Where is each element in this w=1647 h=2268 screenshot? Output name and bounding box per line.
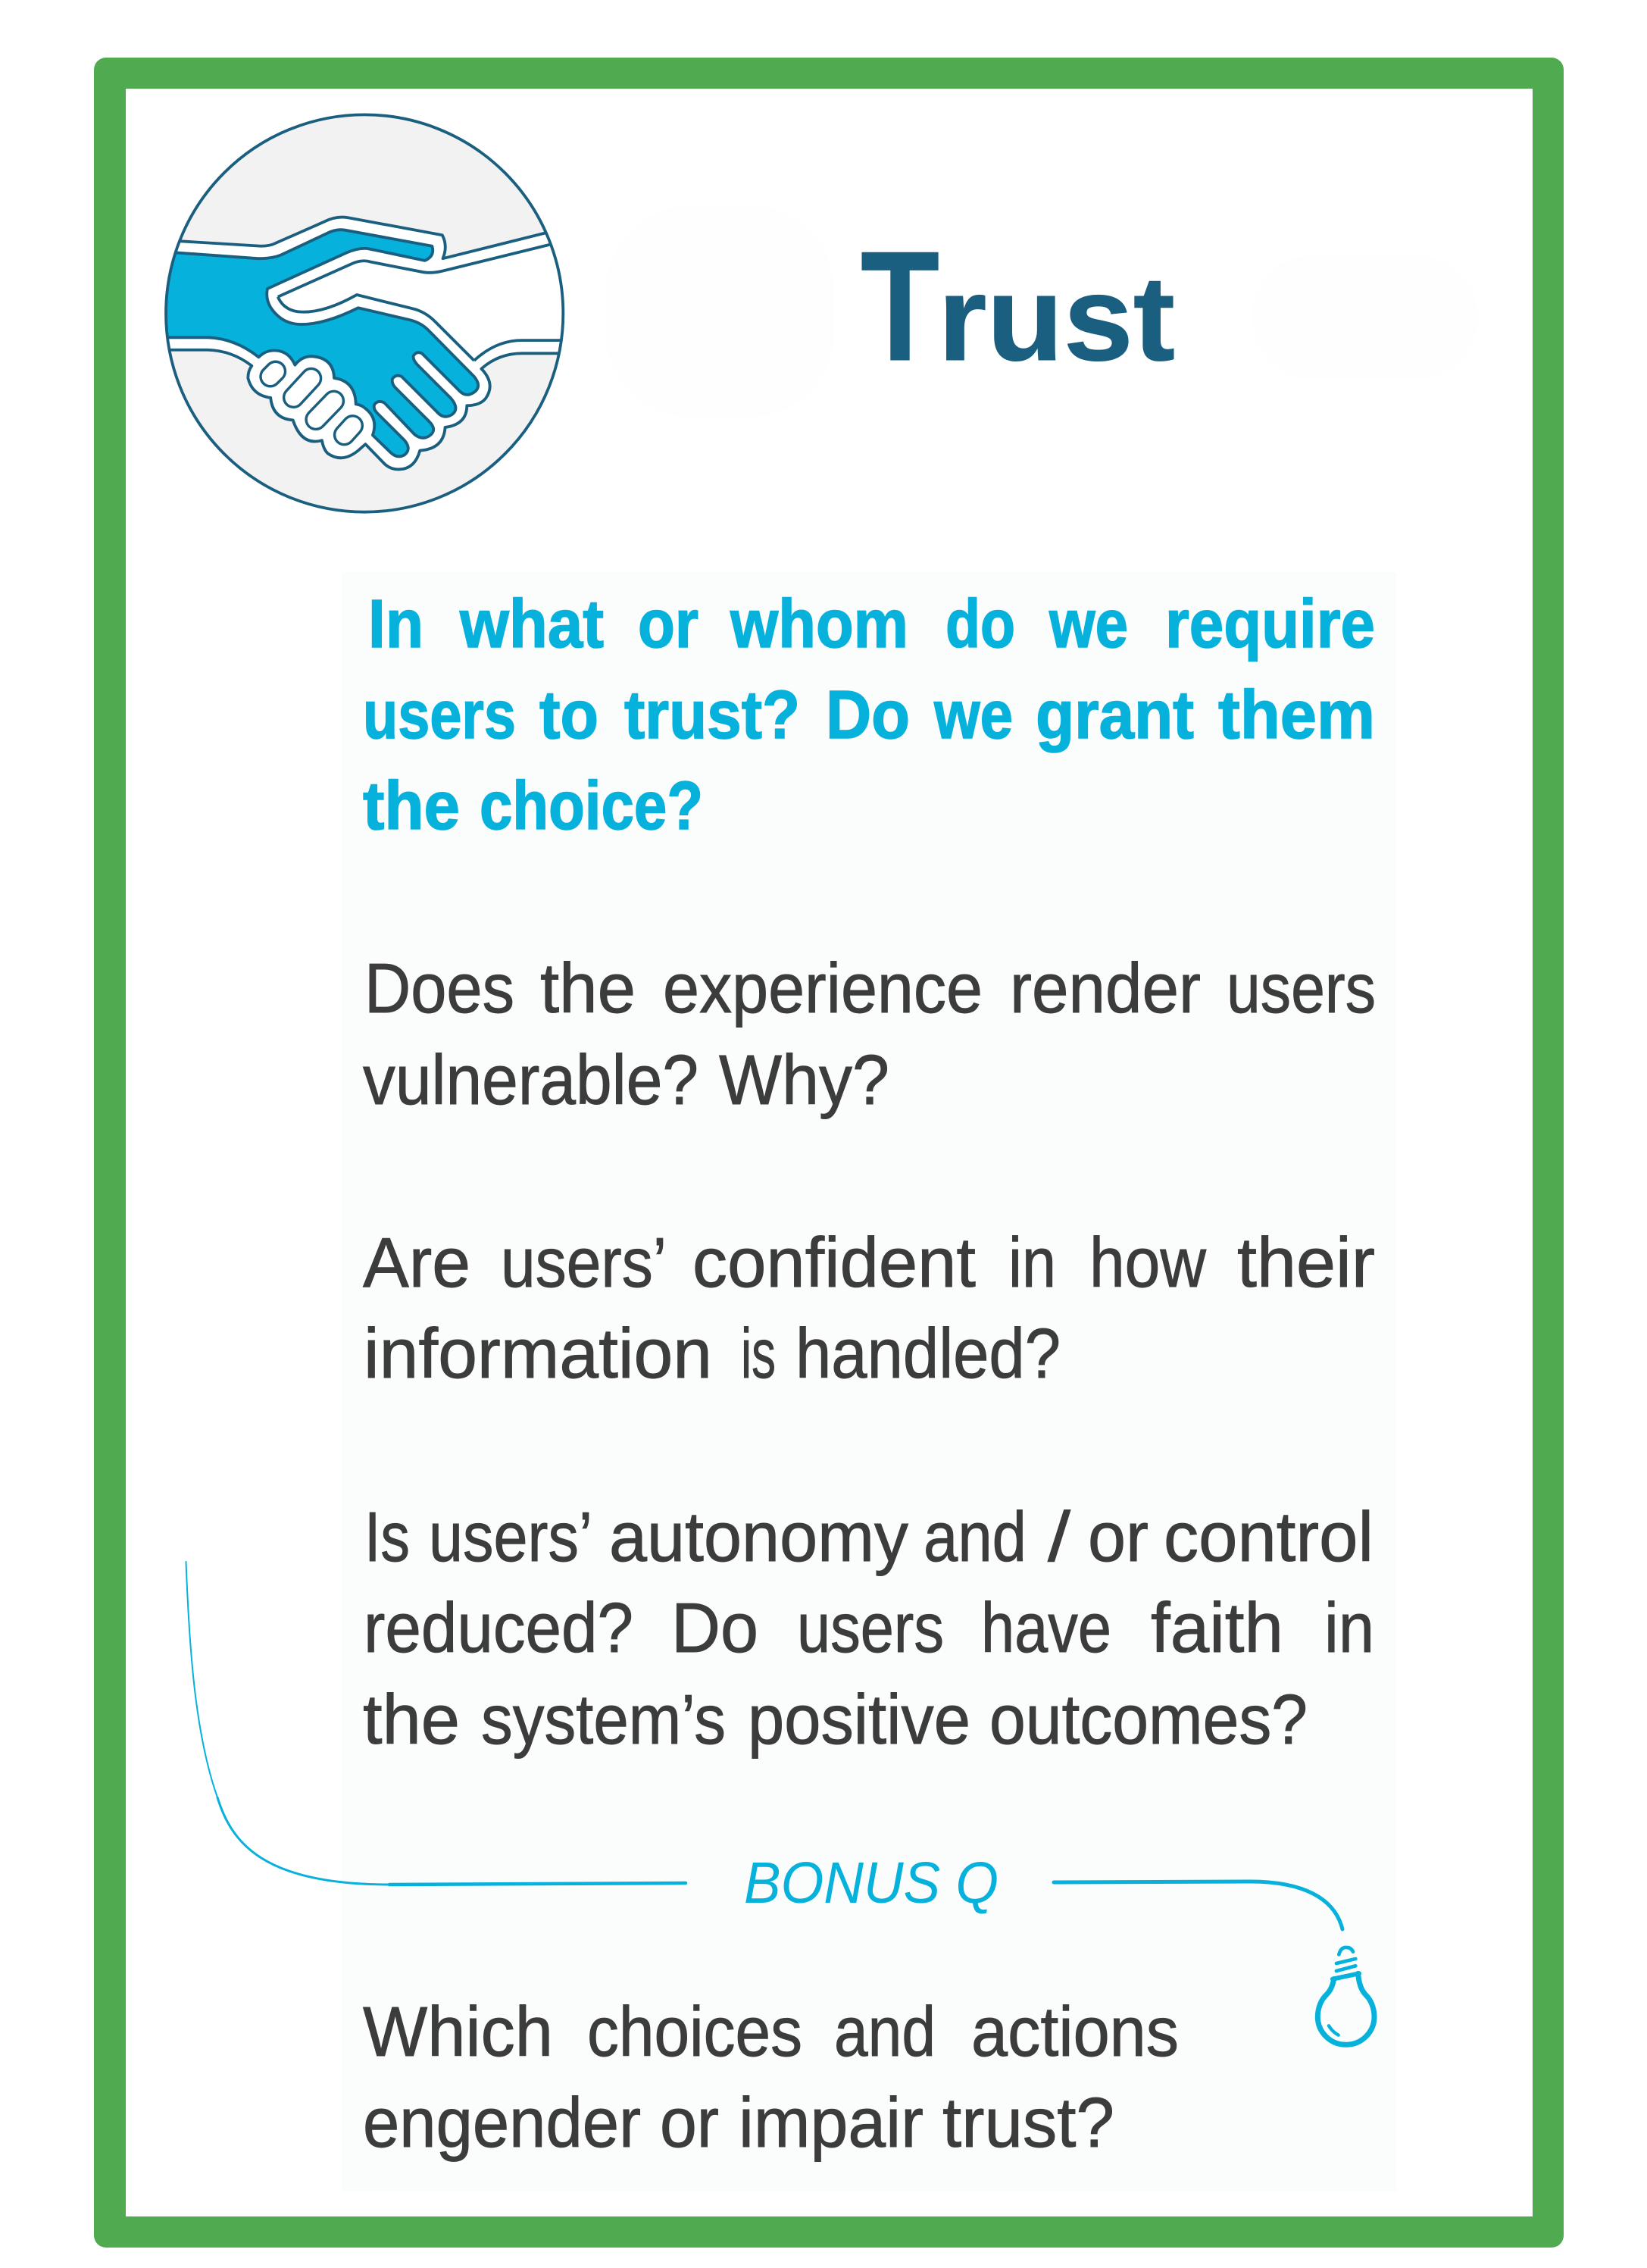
bonus question: or — [660, 2083, 719, 2162]
heading question: whom — [730, 587, 908, 662]
question: vulnerability: Why? — [719, 1040, 889, 1119]
heading question: or — [638, 587, 698, 662]
question: autonomy: / — [1048, 1497, 1070, 1576]
question: autonomy: control — [1164, 1497, 1374, 1576]
question: autonomy: outcomes? — [989, 1680, 1308, 1759]
bonus question: impair — [739, 2083, 924, 2162]
heading question: we — [933, 677, 1013, 753]
title: rust — [938, 251, 1175, 386]
icon: handshake — [165, 114, 571, 512]
question: confidence: how — [1089, 1223, 1207, 1302]
heading question: do — [945, 587, 1015, 662]
question: autonomy: faith — [1151, 1588, 1283, 1667]
question: vulnerability: experience — [663, 949, 983, 1028]
faint title backdrop, left — [606, 206, 834, 417]
question: vulnerability: Does — [364, 949, 514, 1028]
question: autonomy: autonomy — [609, 1497, 908, 1576]
question: confidence: handled? — [795, 1314, 1061, 1393]
bonus question: and — [834, 1992, 936, 2071]
question: confidence: their — [1237, 1223, 1375, 1302]
heading question: require — [1165, 587, 1375, 662]
question: autonomy: users — [797, 1588, 944, 1667]
heading question: grant — [1036, 677, 1194, 753]
question: confidence: Are — [363, 1223, 470, 1302]
heading question: choice? — [480, 768, 703, 844]
bonus question: engender — [363, 2083, 641, 2162]
question: autonomy: have — [981, 1588, 1111, 1667]
bonus label: BONUS Q — [744, 1850, 999, 1916]
heading question: we — [1049, 587, 1128, 662]
icon: light bulb — [1317, 1947, 1374, 2044]
heading question: them — [1218, 677, 1375, 753]
bonus question: Which — [363, 1992, 553, 2071]
question: autonomy: Do — [671, 1588, 758, 1667]
question: confidence: in — [1008, 1223, 1056, 1302]
panel: questions background — [342, 572, 1396, 2191]
heading question: users — [363, 677, 516, 753]
question: autonomy: positive — [748, 1680, 970, 1759]
connector line, left — [186, 1562, 686, 1885]
heading question: to — [539, 677, 598, 753]
question: confidence: is — [741, 1314, 776, 1393]
question: autonomy: and — [924, 1497, 1027, 1576]
heading question: the — [363, 768, 460, 844]
heading question: what — [459, 587, 604, 662]
heading question: Do — [826, 677, 910, 753]
question: vulnerability: vulnerable? — [363, 1040, 698, 1119]
heading question: trust? — [624, 677, 800, 753]
faint title backdrop, right — [1252, 255, 1477, 379]
question: autonomy: system’s — [481, 1680, 726, 1759]
bonus question: actions — [971, 1992, 1179, 2071]
bonus question: choices — [587, 1992, 802, 2071]
question: autonomy: Is — [364, 1497, 410, 1576]
bonus question: trust? — [942, 2083, 1114, 2162]
heading question: In — [368, 587, 423, 662]
question: confidence: users’ — [501, 1223, 664, 1302]
title: T — [861, 219, 939, 393]
connector line, right — [1054, 1882, 1342, 1929]
question: autonomy: the — [363, 1680, 460, 1759]
question: confidence: information — [364, 1314, 712, 1393]
question: autonomy: or — [1088, 1497, 1149, 1576]
question: autonomy: in — [1324, 1588, 1374, 1667]
question: confidence: confident — [692, 1223, 976, 1302]
question: vulnerability: render — [1010, 949, 1201, 1028]
question: autonomy: users’ — [429, 1497, 590, 1576]
question: vulnerability: the — [540, 949, 636, 1028]
question: autonomy: reduced? — [364, 1588, 633, 1667]
question: vulnerability: users — [1227, 949, 1376, 1028]
